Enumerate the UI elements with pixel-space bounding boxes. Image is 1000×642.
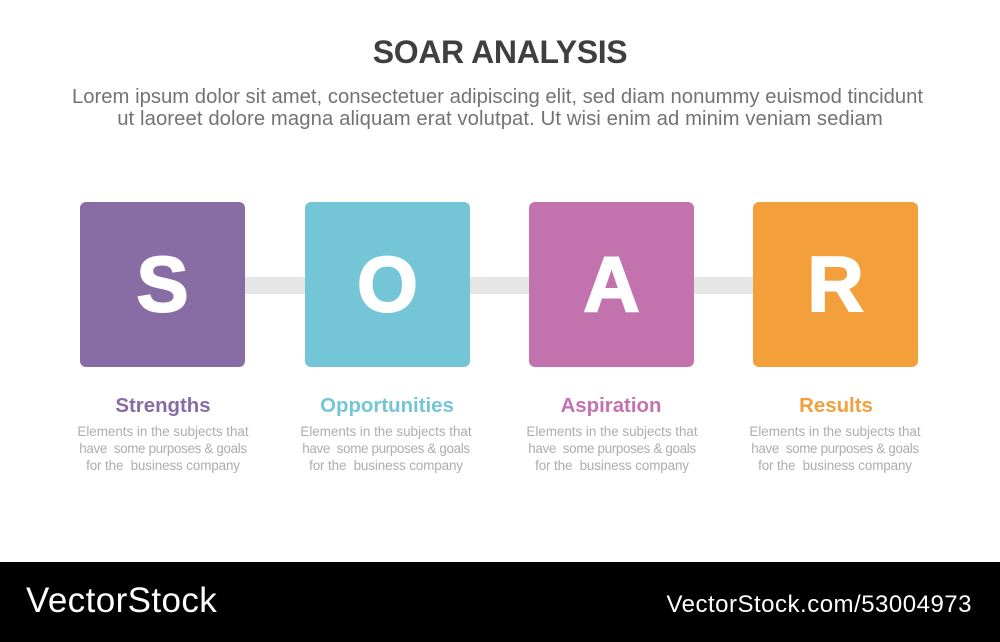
subtitle text: Lorem ipsum dolor sit amet, consectetuer adipiscing elit, sed diam nonummy euismod tincidunt (72, 86, 923, 108)
connector bar (240, 277, 760, 294)
heading: Strengths: Strengths (115, 395, 211, 417)
footer url text: VectorStock.com/53004973 (666, 591, 972, 618)
text: Strengths description: have some purposes & goals (79, 441, 247, 456)
square: R (753, 202, 918, 367)
text: Aspiration description: Elements in the subjects that (526, 424, 698, 439)
text: Strengths description (77, 424, 249, 473)
text: Strengths description: Elements in the subjects that (77, 424, 249, 439)
footer logo text: VectorStock (26, 581, 217, 620)
heading: Results: Results (799, 395, 873, 417)
square: O: O (357, 240, 418, 328)
subtitle text: ut laoreet dolore magna aliquam erat volutpat. Ut wisi enim ad minim veniam sediam (117, 108, 883, 130)
heading: Opportunities: Opportunities (320, 395, 454, 417)
text: Opportunities description: for the business company (309, 458, 463, 473)
footer band (0, 562, 1000, 642)
text: Aspiration description: for the business company (535, 458, 689, 473)
subtitle text (72, 86, 923, 130)
text: Results description: Elements in the subjects that (749, 424, 921, 439)
text: Opportunities description (300, 424, 472, 473)
square: O (305, 202, 470, 367)
title: SOAR ANALYSIS (373, 34, 627, 70)
text: Opportunities description: have some purposes & goals (302, 441, 470, 456)
heading: Aspiration: Aspiration (561, 395, 661, 417)
square: A (529, 202, 694, 367)
text: Strengths description: for the business company (86, 458, 240, 473)
text: Aspiration description (526, 424, 698, 473)
square: A: A (583, 240, 640, 328)
text: Aspiration description: have some purposes & goals (528, 441, 696, 456)
text: Results description: for the business company (758, 458, 912, 473)
square: R: R (807, 240, 864, 328)
text: Opportunities description: Elements in the subjects that (300, 424, 472, 439)
text: Results description (749, 424, 921, 473)
text: Results description: have some purposes & goals (751, 441, 919, 456)
square: S (80, 202, 245, 367)
square: S: S (136, 240, 189, 328)
